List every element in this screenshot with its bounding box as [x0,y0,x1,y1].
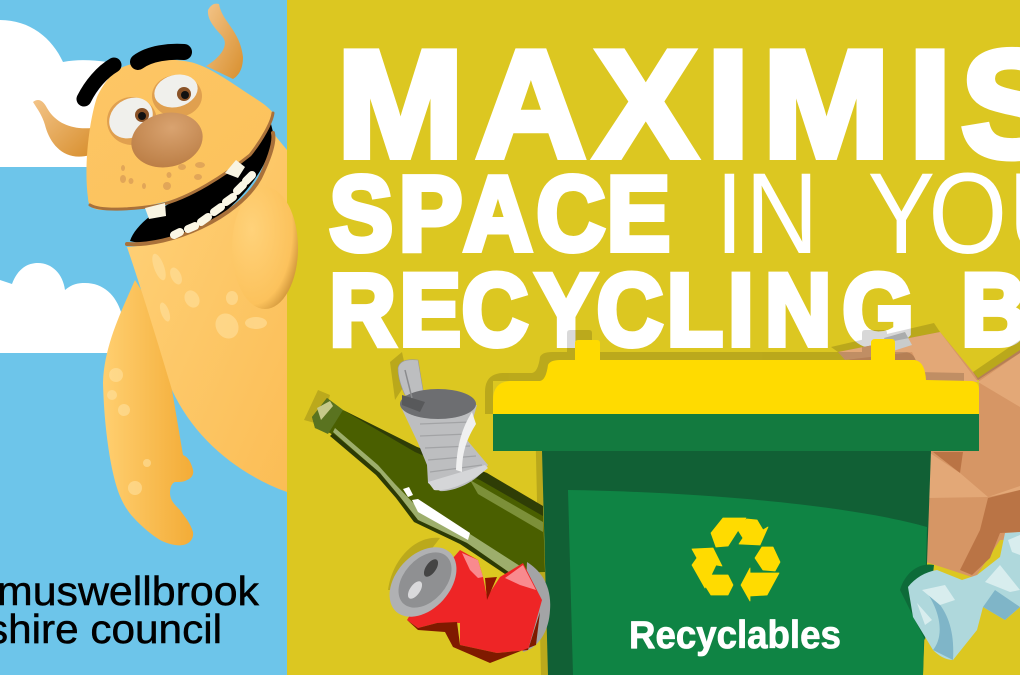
bin rim [493,414,979,451]
plastic bottle [900,532,1020,660]
title line: space: SPACE [329,155,670,273]
monster horn left [33,100,92,157]
logo line 1: muswellbrook [0,568,260,614]
logo: muswellbrook shire council [0,568,260,652]
sky panel [0,0,287,675]
bin body [542,451,931,675]
wheelie bin [493,339,979,675]
monster shoulder bump [232,187,298,309]
title [329,20,1020,367]
crushed tin can [398,360,488,491]
glass bottle [312,398,545,574]
yellow panel [287,0,1020,675]
monster eye left [101,89,161,147]
bin front panel [568,490,927,675]
monster eyebrows [84,52,184,99]
monster eye right [151,70,202,117]
bin lid [493,339,979,414]
monster nose [126,106,208,174]
character: monster [33,4,298,545]
cloud: top [0,20,108,167]
monster horn right [206,4,243,79]
monster mouth [130,124,274,243]
bin label: Recyclables [629,614,841,657]
monster upper lip [90,113,273,209]
cloud: bottom [0,263,121,353]
monster head [86,60,273,210]
icon: recycling symbol [692,518,780,601]
crushed red can [376,534,550,663]
cardboard box [838,332,1020,578]
monster arm [103,280,193,545]
object shadows [304,323,1020,675]
monster teeth [145,160,252,235]
monster lower lip [127,133,273,244]
monster body [127,133,287,492]
